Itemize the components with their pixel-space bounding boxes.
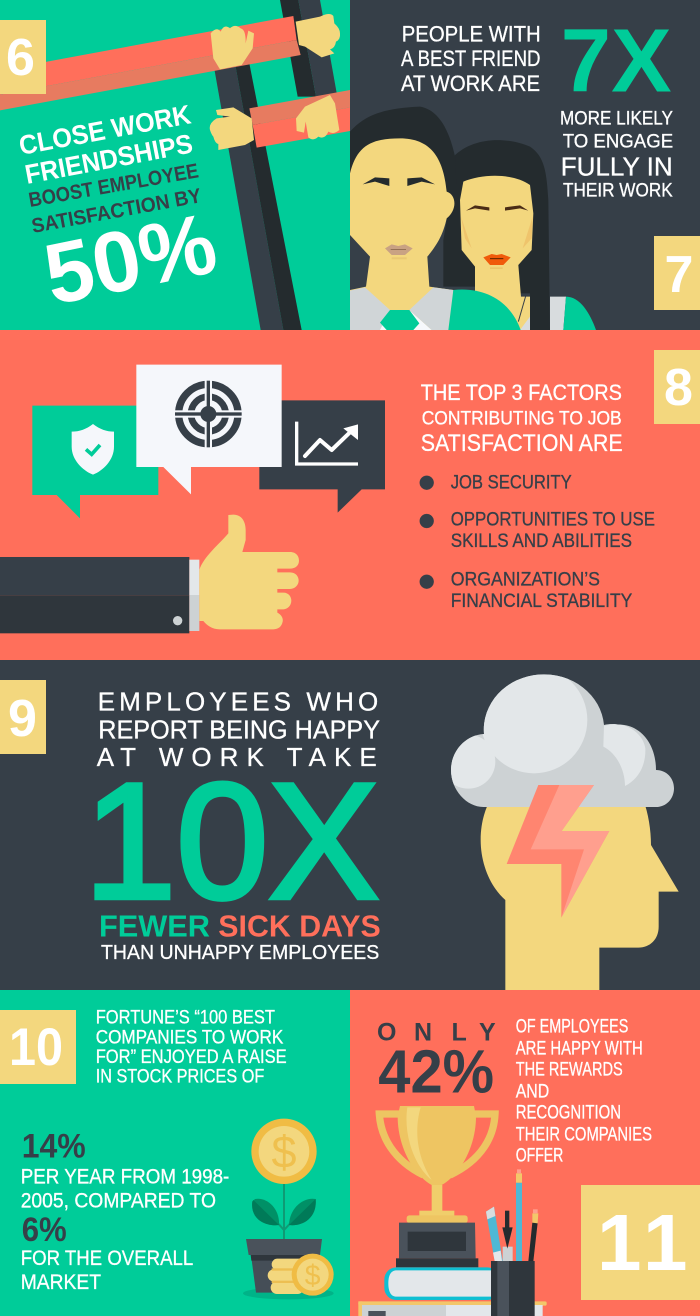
- text: only: [377, 1019, 496, 1047]
- text: people with a best friend at work are: PEOPLE WITH: [402, 22, 541, 47]
- text: than unhappy employees: THAN UNHAPPY EMPLOYEES: [101, 941, 379, 964]
- text: only: N: [414, 1019, 432, 1047]
- text: of employees are happy: ARE HAPPY WITH: [516, 1038, 643, 1059]
- list: three factors: JOB SECURITY: [451, 471, 572, 493]
- text: more likely to engage fully in their work: MORE LIKELY: [560, 107, 673, 129]
- text: employees who report being happy at work take: AT WORK TAKE: [97, 742, 377, 772]
- text: employees who report being happy at work take: REPORT BEING HAPPY: [98, 714, 380, 744]
- illustration: trophy, books and pen cup: [358, 1106, 547, 1316]
- statistic: 42%: 42%: [378, 1037, 494, 1105]
- text: for the overall market: FOR THE OVERALL: [21, 1247, 193, 1270]
- text: fewer sick days: FEWER: [99, 909, 210, 944]
- panel 7: best friend at work: [350, 0, 700, 330]
- subheading: boost employee satisfaction by: SATISFACTION BY: [30, 184, 203, 238]
- heading: the top 3 factors: THE TOP 3 FACTORS: [421, 380, 622, 405]
- text: per year: [21, 1165, 229, 1212]
- illustration: linked arms and straps: [0, 0, 350, 330]
- text: more likely to engage fully in their work: [560, 107, 673, 202]
- panel 9: fewer sick days: [0, 660, 700, 990]
- text: of employees are happy: [516, 1017, 652, 1167]
- text: more likely to engage fully in their work: THEIR WORK: [563, 181, 673, 202]
- badge 8: 8: [664, 359, 693, 417]
- illustration: money plant with coins: $: [305, 1260, 321, 1292]
- panel 8: top 3 job satisfaction factors: [0, 330, 700, 660]
- badge 11: [581, 1185, 700, 1300]
- list: three factors: [420, 471, 655, 612]
- statistic: 50%: 50%: [37, 195, 224, 324]
- heading: the top 3 factors: SATISFACTION ARE: [421, 430, 623, 457]
- badge 10: 10: [9, 1018, 63, 1077]
- panel 10: fortune 100 best companies: [0, 990, 350, 1316]
- list: three factors: OPPORTUNITIES TO USE: [451, 508, 655, 530]
- text: of employees are happy: AND: [516, 1081, 549, 1102]
- text: people with a best friend at work are: A BEST FRIEND: [401, 46, 540, 71]
- statistic: 6%: 6%: [22, 1211, 67, 1249]
- text: fortune's 100 best companies: FOR” ENJOYED A RAISE: [96, 1047, 287, 1068]
- text: fewer sick days: [99, 909, 381, 944]
- text: more likely to engage fully in their work: FULLY IN: [561, 152, 673, 182]
- text: fewer sick days: SICK DAYS: [218, 909, 381, 944]
- badge 7: [654, 236, 700, 310]
- text: people with a best friend at work are: AT WORK ARE: [401, 71, 540, 96]
- heading: close work friendships: CLOSE WORK: [17, 99, 194, 161]
- badge 9: 9: [8, 690, 37, 748]
- statistic: 14%: 14%: [22, 1128, 86, 1166]
- illustration: man and woman: [350, 107, 596, 330]
- text: people with a best friend at work are: [401, 22, 541, 96]
- subheading: boost employee satisfaction by: BOOST EMPLOYEE: [27, 159, 200, 212]
- text: only: O: [377, 1019, 396, 1047]
- badge 11: 11: [597, 1198, 688, 1287]
- badge 6: [0, 20, 46, 94]
- text: only: Y: [479, 1019, 496, 1047]
- panel 6: close work friendships: [0, 0, 350, 330]
- icon: thumbs up hand: [0, 515, 299, 633]
- text: of employees are happy: THE REWARDS: [516, 1060, 623, 1081]
- illustration: money plant with coins: $: [271, 1126, 297, 1177]
- text: per year: PER YEAR FROM 1998-: [21, 1165, 229, 1188]
- text: employees who report being happy at work take: EMPLOYEES WHO: [98, 687, 378, 717]
- illustration: head with storm cloud: [441, 667, 679, 990]
- text: only: L: [452, 1019, 467, 1047]
- heading: the top 3 factors: [421, 380, 623, 457]
- text: fortune's 100 best companies: COMPANIES TO WORK: [96, 1028, 284, 1049]
- panel 11: rewards and recognition: [350, 990, 700, 1316]
- heading: close work friendships: FRIENDSHIPS: [23, 129, 195, 190]
- text: employees who report being happy at work take: [97, 687, 380, 772]
- subheading: boost employee satisfaction by: [27, 159, 203, 238]
- text: of employees are happy: OF EMPLOYEES: [516, 1017, 628, 1038]
- text: fortune's 100 best companies: [96, 1008, 287, 1087]
- text: of employees are happy: OFFER: [516, 1146, 563, 1167]
- badge 10: [0, 1010, 76, 1084]
- illustration: money plant with coins: [243, 1119, 334, 1299]
- text: for the overall market: MARKET: [21, 1271, 101, 1294]
- bubble: green shield: [32, 406, 158, 518]
- text: fortune's 100 best companies: IN STOCK PRICES OF: [96, 1066, 264, 1087]
- badge 9: [0, 680, 46, 754]
- bubble: white target: [136, 365, 282, 494]
- badge 8: [654, 350, 700, 424]
- badge 6: 6: [6, 29, 35, 87]
- statistic: 10X: 10X: [84, 749, 379, 933]
- list: three factors: FINANCIAL STABILITY: [451, 590, 632, 612]
- text: per year: 2005, COMPARED TO: [21, 1189, 216, 1212]
- illustration: speech bubbles and thumbs up: [0, 365, 385, 633]
- heading: the top 3 factors: CONTRIBUTING TO JOB: [422, 408, 622, 429]
- text: of employees are happy: THEIR COMPANIES: [516, 1124, 652, 1145]
- list: three factors: SKILLS AND ABILITIES: [451, 530, 632, 552]
- text: fortune's 100 best companies: FORTUNE’S “100 BEST: [96, 1008, 275, 1029]
- text: more likely to engage fully in their work: TO ENGAGE: [563, 131, 673, 153]
- text: for the overall market: [21, 1247, 193, 1294]
- list: three factors: ORGANIZATION’S: [451, 569, 600, 591]
- heading: close work friendships: [17, 99, 195, 190]
- text: of employees are happy: RECOGNITION: [516, 1103, 621, 1124]
- statistic: 7X: 7X: [561, 12, 672, 112]
- badge 7: 7: [665, 246, 693, 304]
- bubble: dark chart: [259, 400, 385, 513]
